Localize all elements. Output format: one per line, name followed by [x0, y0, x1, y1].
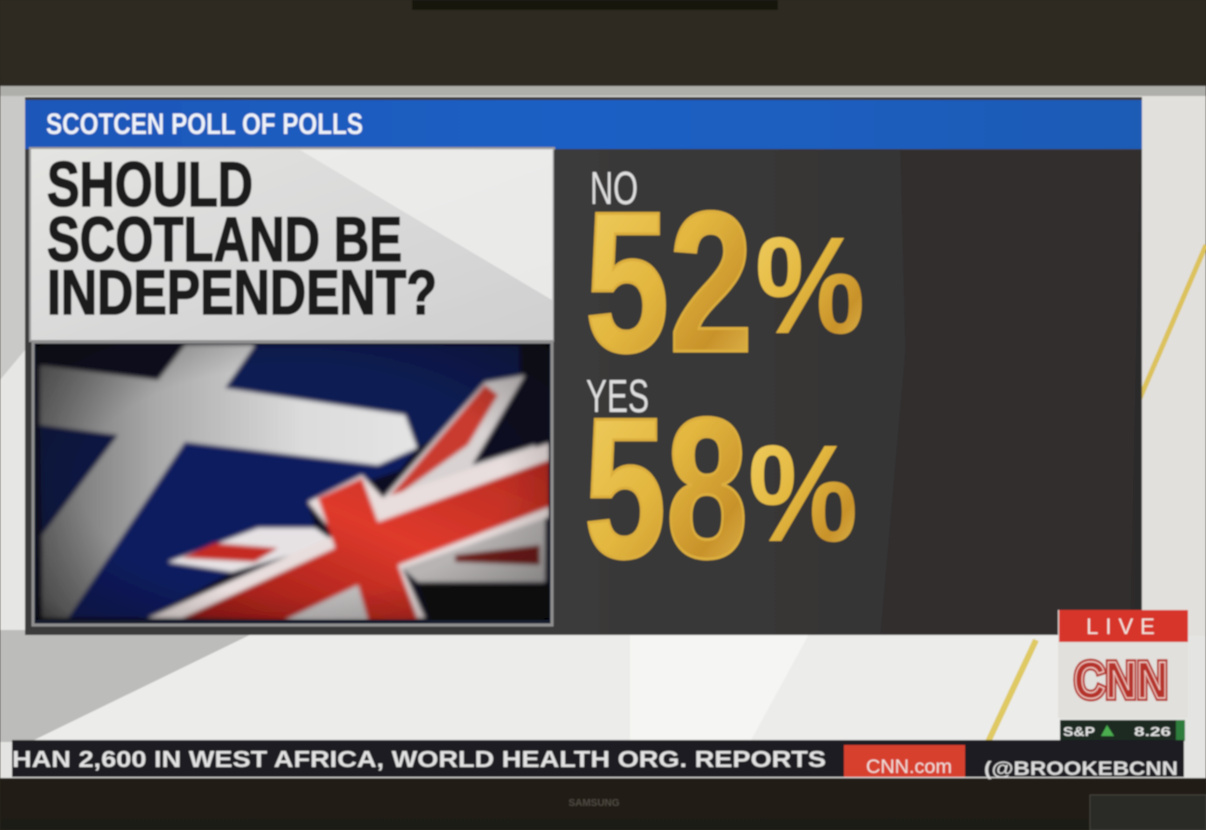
question line 1: SHOULD	[47, 150, 253, 220]
header text: SCOTCEN POLL OF POLLS	[46, 108, 363, 141]
question line 3: INDEPENDENT?	[47, 258, 437, 328]
cnn.com badge	[844, 745, 965, 778]
percent sign: %	[748, 417, 858, 571]
cnn logo: CNN	[1074, 652, 1168, 710]
value: no 52: 52	[585, 171, 753, 394]
question line 2: SCOTLAND BE	[47, 205, 402, 275]
results panel	[554, 150, 1141, 635]
vignette	[36, 344, 549, 620]
header bar	[25, 100, 1142, 149]
union red cross	[182, 460, 549, 620]
panel: poll graphic	[25, 97, 1142, 635]
label: yes: YES	[586, 370, 649, 422]
market ticker: 8.26	[1134, 724, 1171, 739]
cnn.com badge: CNN.com	[866, 757, 952, 778]
union white	[382, 370, 538, 500]
market ticker: S&P	[1063, 724, 1095, 739]
percent sign: %	[755, 209, 865, 363]
question box	[30, 148, 554, 341]
news ticker	[12, 740, 1184, 780]
value: yes 58: 58	[584, 377, 748, 600]
label: no: NO	[590, 162, 638, 214]
saltire	[40, 345, 417, 618]
market ticker	[1060, 720, 1185, 741]
tv frame: SAMSUNG	[568, 798, 620, 809]
cnn logo: CNN	[1074, 652, 1168, 710]
flag image	[30, 340, 555, 625]
ticker text: HAN 2,600 IN WEST AFRICA, WORLD HEALTH ORG. REPORTS	[12, 746, 826, 772]
twitter handle: (@BROOKEBCNN	[984, 759, 1178, 780]
live badge: LIVE	[1086, 614, 1162, 639]
cnn logo block	[1058, 610, 1188, 741]
